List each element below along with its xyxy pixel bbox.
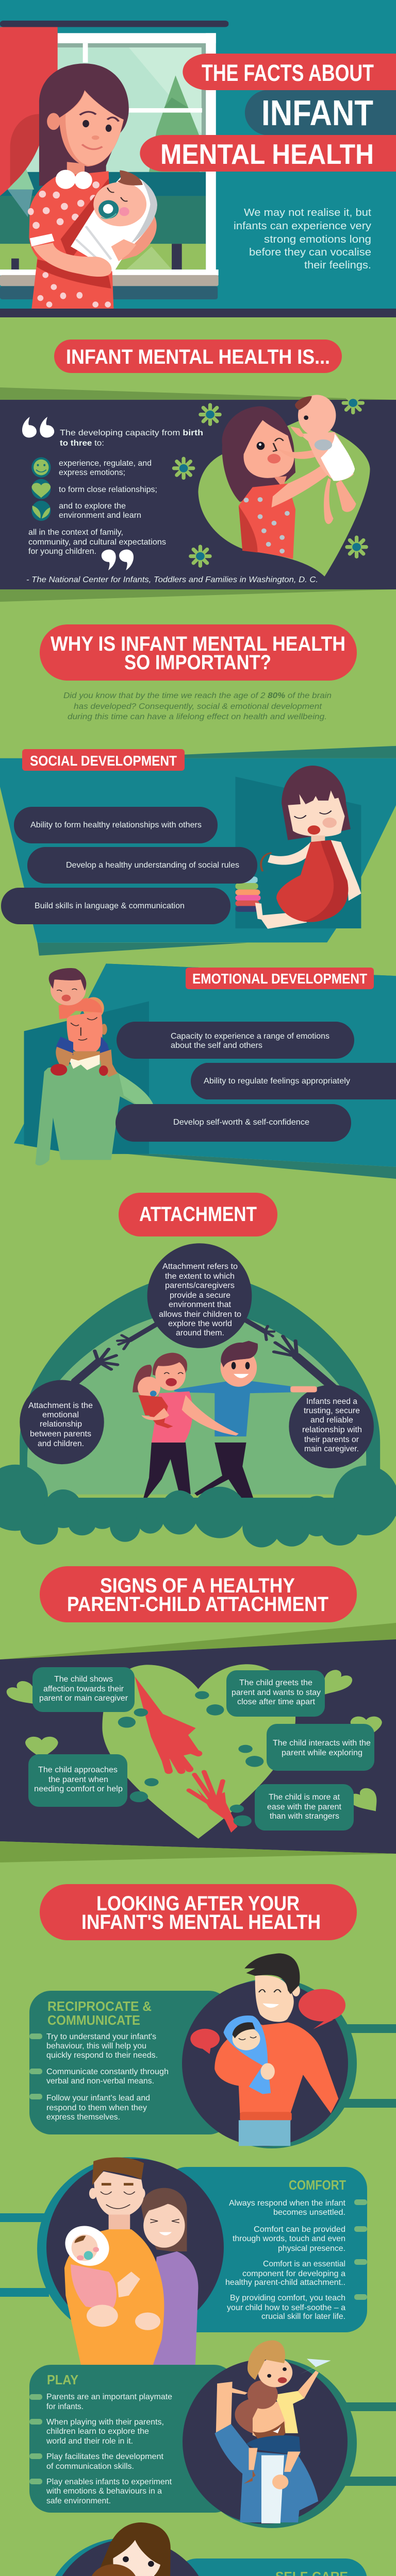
pill: social rules	[27, 847, 257, 884]
heading: attachment: ATTACHMENT	[139, 1203, 257, 1226]
pill: range of emotions: Capacity to experience a range of emotions	[171, 1032, 329, 1041]
pill: self-worth: Develop self-worth & self-confidence	[173, 1118, 309, 1127]
text: attachment definition top: environment that	[169, 1300, 232, 1309]
definition bullets and close: all in the context of family,	[28, 528, 123, 537]
text: attachment left: between parents	[30, 1430, 91, 1438]
hero intro text: their feelings.	[304, 260, 371, 271]
body text: verbal and non-verbal means.	[46, 2077, 154, 2086]
text: attachment left: relationship	[40, 1420, 82, 1429]
sign: greets	[226, 1670, 325, 1717]
tag: emotional development: EMOTIONAL DEVELOPMENT	[192, 971, 367, 987]
sign: at ease: The child is more at	[269, 1793, 340, 1802]
hero intro text: before they can vocalise	[249, 247, 371, 258]
tag: emotional development	[186, 968, 374, 989]
hero illustration: mother and baby at a window	[0, 0, 396, 309]
sign: approaches	[28, 1754, 127, 1807]
panel: hero	[0, 0, 396, 309]
sign: affection: affection towards their	[43, 1685, 124, 1693]
body text: Play facilitates the development	[46, 2452, 164, 2461]
illustration: mother lifting baby	[174, 394, 370, 577]
body text: Always respond when the infant	[229, 2199, 346, 2208]
panel: emotional development	[14, 963, 396, 1179]
citation: - The National Center for Infants, Toddlers and Families in Washington, D. C.	[26, 575, 318, 584]
heading: looking after your infant's mental health: INFANT'S MENTAL HEALTH	[81, 1911, 321, 1934]
panel: reciprocate and communicate	[29, 1953, 396, 2148]
panel background and girl illustration	[0, 746, 396, 956]
heading: signs of a healthy parent-child attachment: PARENT-CHILD ATTACHMENT	[67, 1593, 328, 1616]
definition bullets and close: environment and learn	[59, 511, 141, 520]
text: attachment definition top: parents/caregivers	[165, 1281, 235, 1290]
hero intro text: We may not realise it, but	[244, 207, 371, 218]
title: RECIPROCATE &	[47, 1998, 152, 2014]
text: attachment right: and reliable	[310, 1416, 353, 1425]
hero intro text: infants can experience very	[234, 221, 371, 232]
body text: world and their role in it.	[46, 2437, 133, 2446]
definition intro: The developing capacity from birth	[60, 429, 203, 437]
text: attachment right	[302, 1397, 362, 1453]
sign: interacts	[267, 1724, 374, 1771]
pill: language skills: Build skills in language & communication	[35, 902, 185, 910]
title: COMFORT	[289, 2177, 346, 2193]
tag: social development	[22, 749, 185, 771]
intro paragraph: during this time can have a lifelong effect on health and wellbeing.	[68, 713, 327, 721]
text: attachment left	[28, 1401, 93, 1448]
body text: When playing with their parents,	[46, 2418, 164, 2427]
panel: social development	[0, 746, 396, 956]
body text: Try to understand your infant's	[46, 2032, 156, 2041]
sign: interacts: parent while exploring	[282, 1749, 362, 1757]
heading: infant mental health is: INFANT MENTAL HEALTH IS...	[66, 346, 330, 368]
intro paragraph: has developed? Consequently, social & emotional development	[74, 702, 322, 711]
definition bullets and close	[28, 459, 166, 556]
body text: express themselves.	[46, 2113, 120, 2122]
sign: approaches: the parent when	[48, 1775, 108, 1784]
body text: Comfort is an essential	[263, 2260, 345, 2268]
pill: self-worth	[116, 1104, 351, 1142]
body text: behaviour, this will help you	[46, 2042, 146, 2050]
body text	[46, 2032, 169, 2122]
definition intro: to three to:	[60, 439, 104, 448]
sign: approaches: The child approaches	[38, 1766, 118, 1774]
pill: regulate feelings	[191, 1063, 396, 1099]
text: attachment left: emotional	[42, 1411, 79, 1419]
body text: Play enables infants to experiment	[46, 2478, 172, 2486]
text: attachment definition top: allows their children to	[159, 1310, 241, 1319]
text: attachment right: relationship with	[302, 1426, 362, 1434]
body text	[225, 2199, 346, 2321]
heading: why is infant mental health so important: SO IMPORTANT?	[124, 651, 271, 674]
title: PLAY	[47, 2372, 78, 2387]
intro paragraph	[63, 691, 332, 721]
definition bullets and close: to form close relationships;	[59, 485, 157, 494]
panel background and father illustration	[14, 963, 396, 1179]
sign: at ease: than with strangers	[270, 1812, 339, 1821]
text: attachment definition top: the extent to which	[165, 1272, 235, 1281]
body text: for infants.	[46, 2402, 84, 2411]
sign: greets: parent and wants to stay	[232, 1688, 321, 1697]
body text: physical presence.	[278, 2244, 345, 2253]
body text: Communicate constantly through	[46, 2067, 169, 2076]
definition bullets and close: and to explore the	[59, 502, 126, 511]
body text: safe environment.	[46, 2497, 111, 2505]
sign: affection	[32, 1667, 135, 1712]
title pill: infant: INFANT	[261, 93, 373, 133]
text: attachment definition top: around them.	[176, 1329, 224, 1337]
pill: healthy relationships: Ability to form healthy relationships with others	[30, 821, 202, 829]
heart with reaching hands	[3, 1664, 387, 1839]
bullet markers	[29, 2033, 42, 2099]
pill: social rules: Develop a healthy understanding of social rules	[66, 861, 239, 870]
heading: looking after your infant's mental health	[40, 1884, 357, 1940]
text: attachment left: and children.	[38, 1439, 84, 1448]
title pill: mental health: MENTAL HEALTH	[160, 138, 374, 170]
pill: healthy relationships	[14, 807, 218, 843]
sign: greets: close after time apart	[237, 1698, 316, 1706]
title pill: the facts about	[183, 54, 396, 90]
body text: component for developing a	[242, 2269, 345, 2278]
heading: why is infant mental health so important	[40, 624, 357, 681]
body text: Follow your infant's lead and	[46, 2094, 150, 2103]
icon: opening quote	[22, 417, 54, 437]
illustration: mother holding daughter	[78, 2522, 171, 2576]
body text: of communication skills.	[46, 2462, 134, 2471]
illustration: father with child on shoulders	[214, 2340, 331, 2523]
body text: becomes unsettled.	[273, 2208, 345, 2217]
pill: regulate feelings: Ability to regulate feelings appropriately	[204, 1077, 350, 1086]
sign: approaches: needing comfort or help	[34, 1785, 123, 1793]
body text: with emotions & behaviours in a	[46, 2487, 162, 2496]
body text: your child how to self-soothe – a	[227, 2303, 345, 2312]
panel: self-care	[0, 2522, 367, 2576]
sign: at ease: ease with the parent	[267, 1803, 342, 1811]
heading: infant mental health is	[54, 340, 342, 373]
body text: through words, touch and even	[233, 2234, 345, 2243]
hero intro text: strong emotions long	[264, 234, 371, 245]
text: attachment definition top: Attachment refers to	[162, 1262, 238, 1271]
panel: attachment diagram	[0, 1243, 396, 1547]
body text: quickly respond to their needs.	[46, 2051, 158, 2060]
body text: children learn to explore the	[46, 2427, 149, 2436]
panel: infant mental health definition	[0, 387, 396, 602]
body text: By providing comfort, you teach	[230, 2294, 345, 2302]
definition bullets and close: community, and cultural expectations	[28, 538, 166, 547]
pill: range of emotions: about the self and others	[171, 1041, 262, 1050]
heading: signs of a healthy parent-child attachment: SIGNS OF A HEALTHY	[100, 1574, 295, 1597]
icon: leaves	[31, 501, 51, 521]
heading: attachment	[119, 1193, 277, 1236]
heading: looking after your infant's mental health: LOOKING AFTER YOUR	[96, 1892, 300, 1915]
text: attachment left: Attachment is the	[28, 1401, 93, 1410]
icon: smiley	[31, 457, 51, 478]
definition bullets and close: express emotions;	[59, 468, 125, 477]
body text: Comfort can be provided	[254, 2225, 345, 2234]
text: attachment right: Infants need a	[306, 1397, 357, 1406]
hero intro text	[234, 207, 371, 271]
icon: closing quote	[102, 550, 134, 570]
tag: social development: SOCIAL DEVELOPMENT	[30, 753, 177, 769]
text: attachment definition top	[159, 1262, 241, 1337]
sign: greets: The child greets the	[239, 1679, 312, 1687]
panel: signs	[0, 1623, 396, 1862]
heading: signs of a healthy parent-child attachment	[40, 1566, 357, 1622]
pill: language skills	[1, 888, 230, 924]
sign: interacts: The child interacts with the	[273, 1739, 371, 1748]
sign: affection: parent or main caregiver	[39, 1694, 128, 1703]
panel: play	[29, 2340, 396, 2528]
pill: range of emotions	[117, 1022, 354, 1059]
body text	[46, 2393, 172, 2505]
illustration: father holding infant	[190, 1953, 345, 2146]
body text: Parents are an important playmate	[46, 2393, 172, 2401]
illustration: parents with newborn	[59, 2157, 198, 2399]
definition intro	[60, 429, 203, 448]
text: attachment definition top: provide a secure	[170, 1291, 230, 1300]
text: attachment right: trusting, secure	[304, 1406, 360, 1415]
sign: at ease	[255, 1784, 354, 1831]
body text: respond to them when they	[46, 2104, 147, 2112]
definition bullets and close: experience, regulate, and	[59, 459, 152, 468]
heading: why is infant mental health so important: WHY IS INFANT MENTAL HEALTH	[51, 633, 345, 655]
title: COMMUNICATE	[47, 2012, 140, 2028]
text: attachment right: their parents or	[304, 1435, 359, 1444]
text: attachment right: main caregiver.	[304, 1445, 359, 1453]
arch, bushes and family illustration	[0, 1243, 396, 1547]
sign: affection: The child shows	[54, 1675, 113, 1684]
bullet markers	[354, 2199, 367, 2300]
text: attachment definition top: explore the world	[168, 1319, 232, 1328]
panel: comfort	[0, 2157, 367, 2399]
title	[47, 1998, 152, 2028]
intro paragraph: Did you know that by the time we reach the age of 2 80% of the brain	[63, 691, 332, 700]
bullet markers	[29, 2394, 42, 2484]
body text: crucial skill for later life.	[261, 2312, 345, 2321]
body text: healthy parent-child attachment..	[225, 2278, 345, 2287]
icon: heart	[31, 479, 51, 499]
definition bullets and close: for young children.	[28, 547, 96, 556]
